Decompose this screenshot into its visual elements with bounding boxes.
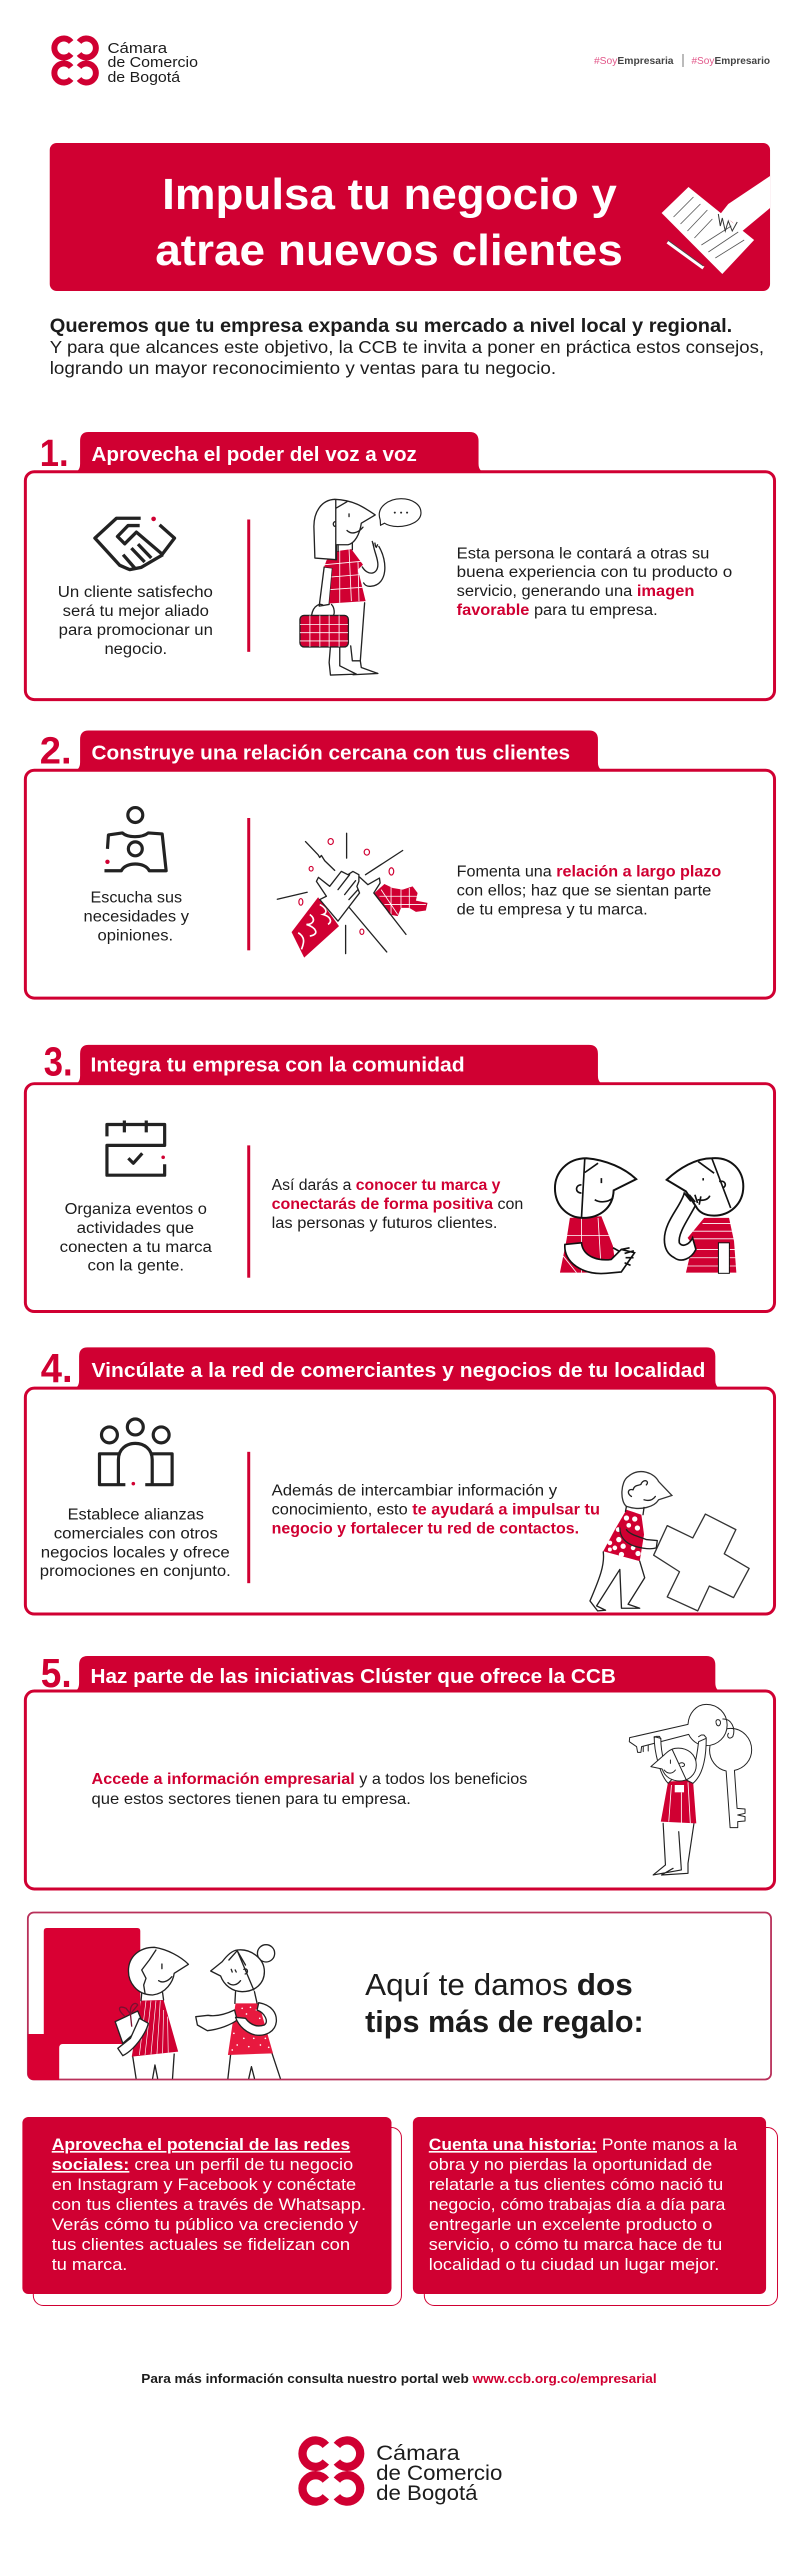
text: alliances: negocios locales y ofrece bbox=[41, 1544, 230, 1561]
text: listen: opiniones. bbox=[98, 927, 173, 944]
card: tip 1 social media: en Instagram y Facebook y conéctate bbox=[52, 2176, 356, 2194]
red decorative block bbox=[28, 1928, 140, 2080]
intro text: logrando un mayor reconocimiento y ventas para tu negocio. bbox=[50, 358, 556, 378]
footer logo: Cámara de Comercio de Bogotá: de Bogotá bbox=[376, 2482, 478, 2505]
section 5 number: 5. bbox=[41, 1650, 72, 1696]
icon: calendar bbox=[107, 1120, 165, 1175]
section 4 tab heading: Vincúlate a la red de comerciantes y negocios de tu localidad bbox=[92, 1360, 705, 1382]
section 4 tab heading bbox=[71, 1347, 724, 1389]
card: tip 2 tell a story bbox=[413, 2117, 778, 2306]
panel: section 4 bbox=[25, 1345, 775, 1614]
header logo: Cámara de Comercio de Bogotá bbox=[54, 38, 198, 86]
card: tip 1 social media: con tus clientes a través de Whatsapp. bbox=[52, 2196, 366, 2214]
text: alliances: comerciales con otros bbox=[54, 1525, 218, 1542]
text: organize events: Organiza eventos o bbox=[65, 1201, 207, 1218]
hashtags bbox=[594, 54, 770, 67]
text: know your brand: conectarás de forma positiva con bbox=[272, 1196, 523, 1213]
text: exchange info: conocimiento, esto te ayudará a impulsar tu bbox=[272, 1502, 600, 1519]
hashtags: #SoyEmpresario bbox=[691, 56, 770, 67]
intro text: Queremos que tu empresa expanda su mercado a nivel local y regional. bbox=[50, 316, 732, 337]
card: tip 2 tell a story: entregarle un excelente producto o bbox=[429, 2216, 712, 2234]
section 5 tab heading bbox=[71, 1656, 724, 1692]
footer logo: Cámara de Comercio de Bogotá: de Comercio bbox=[376, 2462, 502, 2485]
card: tip 1 social media: tu marca. bbox=[52, 2256, 127, 2274]
text: cluster benefits: que estos sectores tienen para tu empresa. bbox=[92, 1791, 411, 1808]
icon: person with book bbox=[104, 808, 166, 871]
text: word of mouth bbox=[457, 545, 732, 619]
card: tip 2 tell a story: servicio, o cómo tu marca hace de tu bbox=[429, 2236, 722, 2254]
section 2 number: 2. bbox=[40, 730, 72, 772]
text: long term relation: con ellos; haz que se sientan parte bbox=[457, 883, 711, 900]
section 2 tab heading bbox=[72, 730, 607, 771]
card: tip 2 tell a story: obra y no pierdas la oportunidad de bbox=[429, 2156, 712, 2174]
card: tip 1 social media bbox=[22, 2117, 401, 2306]
text: know your brand: las personas y futuros clientes. bbox=[272, 1215, 497, 1232]
title bbox=[155, 170, 623, 275]
title banner bbox=[50, 143, 770, 291]
text: satisfied client: será tu mejor aliado bbox=[63, 603, 209, 620]
text: satisfied client bbox=[58, 584, 213, 658]
section 3 tab heading bbox=[72, 1045, 607, 1085]
text: know your brand: Así darás a conocer tu marca y bbox=[272, 1177, 501, 1194]
text: long term relation bbox=[457, 864, 721, 919]
footer call to action: Para más información consulta nuestro portal web www.ccb.org.co/empresarial bbox=[141, 2371, 657, 2386]
section 5 tab heading: Haz parte de las iniciativas Clúster que ofrece la CCB bbox=[91, 1666, 616, 1688]
panel: section 5 bbox=[25, 1650, 775, 1889]
icon: signing paper bbox=[662, 176, 770, 274]
text: cluster benefits: Accede a información empresarial y a todos los beneficios bbox=[92, 1771, 528, 1788]
text: two tips: tips más de regalo: bbox=[365, 2004, 644, 2039]
header logo: Cámara de Comercio de Bogotá: Cámara bbox=[107, 40, 168, 57]
text: word of mouth: Esta persona le contará a otras su bbox=[457, 545, 709, 562]
text: organize events: actividades que bbox=[77, 1220, 194, 1237]
title: Impulsa tu negocio y bbox=[162, 170, 617, 219]
illustration: man with gift and woman bbox=[115, 1945, 280, 2078]
text: two tips bbox=[365, 1967, 644, 2039]
text: exchange info: Además de intercambiar información y bbox=[272, 1483, 557, 1500]
text: exchange info bbox=[272, 1483, 600, 1537]
card: tip 2 tell a story: relatarle a tus clientes cómo nació tu bbox=[429, 2176, 723, 2194]
icon: handshake bbox=[95, 517, 174, 570]
text: organize events: conecten a tu marca bbox=[60, 1239, 212, 1256]
text: long term relation: de tu empresa y tu marca. bbox=[457, 902, 648, 919]
icon: group of people bbox=[99, 1419, 172, 1485]
text: word of mouth: buena experiencia con tu producto o bbox=[457, 564, 732, 581]
text: alliances: promociones en conjunto. bbox=[40, 1563, 231, 1580]
text: word of mouth: servicio, generando una imagen bbox=[457, 583, 694, 600]
text: know your brand bbox=[272, 1177, 523, 1232]
section 4 number: 4. bbox=[41, 1345, 73, 1391]
text: word of mouth: favorable para tu empresa. bbox=[457, 602, 658, 619]
section 2 tab heading: Construye una relación cercana con tus clientes bbox=[92, 742, 570, 764]
panel: section 1 bbox=[25, 432, 775, 700]
text: two tips: Aquí te damos dos bbox=[365, 1967, 633, 2002]
section 1 number: 1. bbox=[40, 433, 69, 475]
illustration: woman with bag and speech bubble bbox=[300, 499, 421, 675]
card: tip 2 tell a story: Cuenta una historia: Ponte manos a la bbox=[429, 2136, 738, 2154]
section 1 tab heading bbox=[72, 432, 488, 473]
text: satisfied client: Un cliente satisfecho bbox=[58, 584, 213, 601]
card: tip 1 social media: Verás cómo tu público va creciendo y bbox=[52, 2216, 359, 2234]
text: satisfied client: para promocionar un bbox=[59, 622, 213, 639]
header logo: Cámara de Comercio de Bogotá: de Comercio bbox=[107, 54, 198, 71]
illustration: person pushing a cross bbox=[590, 1472, 749, 1611]
text: alliances: Establece alianzas bbox=[68, 1506, 204, 1523]
text: alliances bbox=[40, 1506, 231, 1580]
illustration: high five bbox=[277, 833, 428, 958]
hashtags: #SoyEmpresaria bbox=[594, 56, 674, 67]
illustration: person lifting keys bbox=[629, 1704, 752, 1875]
text: listen: necesidades y bbox=[84, 908, 189, 925]
footer logo: Cámara de Comercio de Bogotá bbox=[303, 2440, 502, 2505]
panel: section 2 bbox=[25, 730, 775, 998]
card: tip 1 social media: tus clientes actuales se fidelizan con bbox=[52, 2236, 350, 2254]
intro text: Y para que alcances este objetivo, la CCB te invita a poner en práctica estos consejos, bbox=[50, 337, 764, 357]
card: tip 1 social media: sociales: crea un perfil de tu negocio bbox=[52, 2156, 353, 2174]
card: tip 2 tell a story: localidad o tu ciudad un lugar mejor. bbox=[429, 2256, 719, 2274]
section 3 number: 3. bbox=[44, 1039, 73, 1085]
section 3 tab heading: Integra tu empresa con la comunidad bbox=[91, 1055, 465, 1077]
illustration: two people talking bbox=[555, 1158, 743, 1274]
footer logo: Cámara de Comercio de Bogotá: Cámara bbox=[376, 2442, 460, 2465]
intro text bbox=[50, 316, 764, 378]
section 1 tab heading: Aprovecha el poder del voz a voz bbox=[92, 444, 417, 466]
text: exchange info: negocio y fortalecer tu red de contactos. bbox=[272, 1520, 579, 1537]
card: tip 1 social media: Aprovecha el potencial de las redes bbox=[52, 2136, 350, 2154]
title: atrae nuevos clientes bbox=[155, 226, 623, 275]
panel: section 3 bbox=[25, 1039, 775, 1312]
text: listen: Escucha sus bbox=[91, 890, 182, 907]
text: satisfied client: negocio. bbox=[104, 641, 167, 658]
header logo: Cámara de Comercio de Bogotá: de Bogotá bbox=[107, 69, 181, 86]
panel: two extra tips banner bbox=[28, 1912, 771, 2080]
text: organize events bbox=[60, 1201, 212, 1275]
text: listen bbox=[84, 890, 189, 944]
text: cluster benefits bbox=[92, 1771, 528, 1808]
card: tip 2 tell a story: negocio, cómo trabajas día a día para bbox=[429, 2196, 726, 2214]
text: organize events: con la gente. bbox=[88, 1258, 184, 1275]
text: long term relation: Fomenta una relación a largo plazo bbox=[457, 864, 721, 881]
